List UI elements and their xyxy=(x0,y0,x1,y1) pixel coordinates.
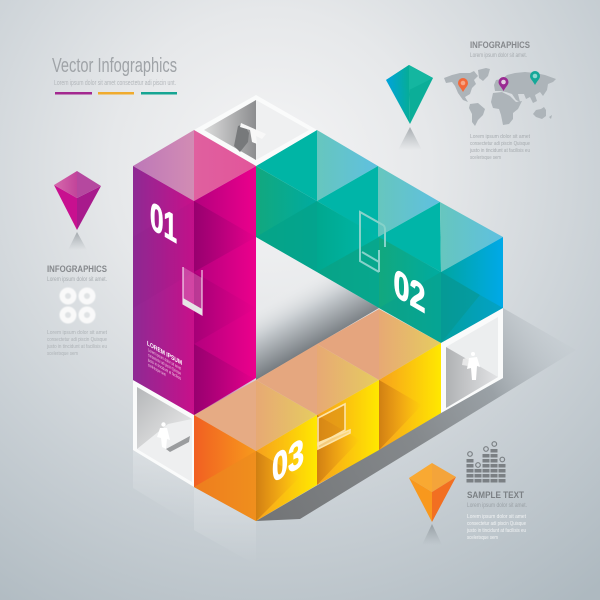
paragraph: justo in tincidunt at facilisis eu xyxy=(469,148,530,154)
icon: teal gem xyxy=(386,65,433,150)
panel: left info xyxy=(46,264,107,357)
icon: phone xyxy=(183,267,202,315)
title: Vector Infographics xyxy=(52,55,177,77)
icon: figure in top cell xyxy=(234,123,266,152)
colored rules xyxy=(55,92,177,94)
orange bar top surface xyxy=(194,309,441,451)
map pin: purple xyxy=(498,77,508,91)
icon: orange gem xyxy=(409,463,456,545)
map pin: teal xyxy=(530,71,540,85)
magenta column right face xyxy=(194,166,256,415)
number 02: 02 xyxy=(394,260,426,322)
heading: INFOGRAPHICS xyxy=(47,264,107,274)
inner triangle shadow xyxy=(256,237,379,380)
text: lorem ipsum on magenta: LOREM IPSUM xyxy=(147,340,182,367)
paragraph: Lorem ipsum dolor sit amet xyxy=(47,330,107,336)
paragraph: scelerisque sem xyxy=(47,351,78,357)
orange bar left face xyxy=(194,415,256,521)
paragraph: consectetur adi piscin Quisque xyxy=(47,337,107,343)
panel: world map info xyxy=(444,40,556,161)
panel: top cell with figure xyxy=(194,95,317,166)
teal bar front faces xyxy=(256,166,441,343)
paragraph xyxy=(46,330,107,357)
magenta column top xyxy=(133,130,256,201)
sub heading: Lorem ipsum dolor sit amet. xyxy=(470,52,527,59)
paragraph xyxy=(466,514,526,541)
teal bar end face xyxy=(441,237,503,343)
icon: equalizer chart xyxy=(466,442,506,482)
panel: step 02 teal bar xyxy=(256,130,503,343)
text: lorem ipsum on magenta: consectetur adi piscin Quisque xyxy=(148,352,181,377)
panel: step 03 orange bar xyxy=(194,309,441,521)
heading: SAMPLE TEXT xyxy=(467,490,524,500)
title block xyxy=(52,55,177,94)
text: lorem ipsum on magenta: Lorem ipsum dolor sit amet xyxy=(148,347,181,372)
heading: INFOGRAPHICS xyxy=(470,40,530,50)
panel: step 01 magenta column xyxy=(133,130,256,415)
panel: right cell with figure xyxy=(441,308,503,413)
text: lorem ipsum on magenta: scelerisque sem xyxy=(148,362,166,378)
paragraph: Lorem ipsum dolor sit amet xyxy=(467,514,526,520)
paragraph: scelerisque sem xyxy=(467,535,498,541)
floor shadow under the 3D shape xyxy=(133,308,576,565)
paragraph: consectetur adi piscin Quisque xyxy=(467,521,526,527)
world map xyxy=(444,68,556,126)
orange bar right faces xyxy=(256,343,441,521)
paragraph xyxy=(469,134,530,161)
map pin: orange xyxy=(458,78,468,92)
paragraph: justo in tincidunt at facilisis eu xyxy=(466,528,526,534)
paragraph: scelerisque sem xyxy=(470,155,501,161)
magenta column left face xyxy=(133,166,194,415)
icon: magenta gem xyxy=(54,171,101,250)
icon: laptop outline xyxy=(318,404,350,449)
text: lorem ipsum on magenta xyxy=(147,340,182,382)
icon: donut charts xyxy=(60,288,96,324)
icon: figure in bottom-left cell xyxy=(157,422,190,452)
subtitle: Lorem ipsum dolor sit amet consectetur adi piscin unt. xyxy=(54,78,176,87)
panel: sample text info xyxy=(466,442,527,541)
teal bar top surface xyxy=(256,130,503,272)
paragraph: consectetur adi piscin Quisque xyxy=(470,141,530,147)
panel: bottom-left cell with figure xyxy=(133,380,194,487)
icon: figure in right cell xyxy=(462,352,480,380)
paragraph: justo in tincidunt at facilisis eu xyxy=(46,344,107,350)
sub heading: Lorem ipsum dolor sit amet. xyxy=(47,276,107,283)
sub heading: Lorem ipsum dolor sit amet. xyxy=(467,502,527,509)
paragraph: Lorem ipsum dolor sit amet xyxy=(470,134,530,140)
number 03: 03 xyxy=(272,429,304,491)
number 01: 01 xyxy=(150,193,177,252)
icon: tablet outline xyxy=(360,212,385,272)
text: lorem ipsum on magenta: justo in tincidunt at facilisis xyxy=(147,357,181,382)
